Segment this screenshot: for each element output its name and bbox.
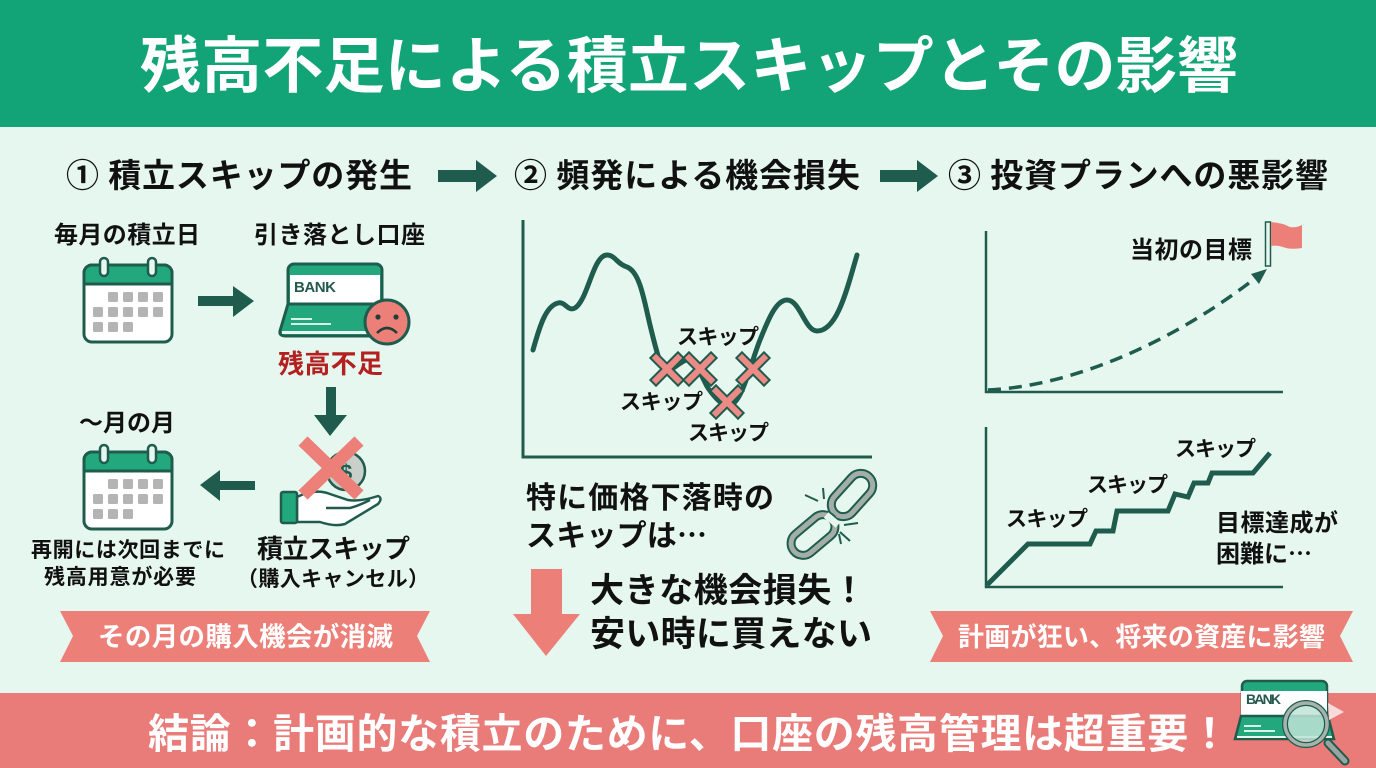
ribbon: plan disrupted: [930, 611, 1353, 662]
icon: x marker 1: [656, 358, 678, 380]
arrow: step 2 to 3: [880, 160, 938, 192]
conclusion bar: [0, 693, 1376, 768]
text: difficult to reach goal: [1216, 503, 1338, 569]
icon: x marker 2: [689, 358, 711, 380]
icon: x marker 3: [716, 391, 738, 413]
label: skip: 積立スキップ: [257, 529, 410, 566]
label: insufficient balance: 残高不足: [278, 344, 383, 381]
text: price drop note: [526, 473, 774, 555]
text: resume note: 再開には次回までに: [31, 534, 225, 564]
icon: hand with crossed coin: [281, 441, 380, 525]
icon: calendar next: [84, 445, 172, 529]
icon: hand with crossed coin: $: [340, 460, 352, 485]
label: skip 3: スキップ: [1175, 433, 1256, 463]
text: price drop note: 特に価格下落時の: [526, 473, 774, 517]
arrow: big down: [513, 569, 580, 656]
label: skip top: スキップ: [677, 321, 759, 351]
icon: x marker 4: [742, 358, 764, 380]
step heading 1: ① 積立スキップの発生: [66, 149, 412, 197]
arrow: step 1 to 2: [438, 160, 497, 192]
panel: skip occurrence flow: [31, 215, 430, 662]
step heading 3: ③ 投資プランへの悪影響: [948, 149, 1328, 197]
icon: bank card with magnifier: [1235, 681, 1345, 761]
arrow: back to calendar: [200, 470, 255, 501]
text: difficult to reach goal: 困難に…: [1216, 534, 1312, 569]
label: skip 1: スキップ: [1006, 503, 1088, 533]
label: purchase cancelled: （購入キャンセル）: [237, 563, 429, 593]
chart: price line with skips: [523, 220, 872, 457]
icon: broken chain: [786, 468, 878, 560]
chart: staircase with skips: [986, 427, 1338, 587]
arrow: calendar to bank: [198, 286, 254, 317]
text: big opportunity loss: 大きな機会損失！: [590, 563, 866, 612]
icon: bank card with sad face: [280, 264, 409, 344]
icon: bank card with sad face: BANK: [294, 279, 336, 296]
text: resume note: [31, 534, 225, 591]
label: month: 〜月の月: [79, 403, 175, 438]
panel: opportunity loss: [513, 220, 878, 657]
text: big opportunity loss: 安い時に買えない: [590, 606, 872, 657]
ribbon: opportunity lost: [60, 611, 430, 662]
panel: plan impact: [930, 222, 1353, 662]
label: skip left: スキップ: [620, 386, 703, 416]
step heading 2: ② 頻発による機会損失: [514, 149, 860, 197]
label: debit account: 引き落とし口座: [254, 215, 425, 250]
icon: calendar: [84, 258, 172, 342]
ribbon: plan disrupted: 計画が狂い、将来の資産に影響: [958, 617, 1325, 654]
text: price drop note: スキップは…: [526, 511, 707, 555]
icon: bank card with magnifier: BANK: [1246, 691, 1281, 707]
icon: goal flag: [1266, 222, 1302, 266]
arrow head: [1251, 269, 1267, 284]
title banner: [0, 0, 1376, 127]
label: monthly date: 毎月の積立日: [54, 215, 200, 250]
ribbon: opportunity lost: その月の購入機会が消滅: [98, 615, 394, 654]
text: resume note: 残高用意が必要: [44, 561, 196, 591]
label: initial goal: 当初の目標: [1130, 230, 1252, 265]
label: skip 2: スキップ: [1087, 469, 1168, 499]
title: 残高不足による積立スキップとその影響: [140, 16, 1238, 105]
arrow: down: [314, 387, 347, 436]
conclusion text: 結論：計画的な積立のために、口座の残高管理は超重要！: [148, 700, 1230, 760]
chart: planned growth: [986, 222, 1302, 392]
text: difficult to reach goal: 目標達成が: [1216, 503, 1338, 538]
label: skip bottom: スキップ: [688, 417, 769, 447]
text: big opportunity loss: [590, 563, 872, 657]
